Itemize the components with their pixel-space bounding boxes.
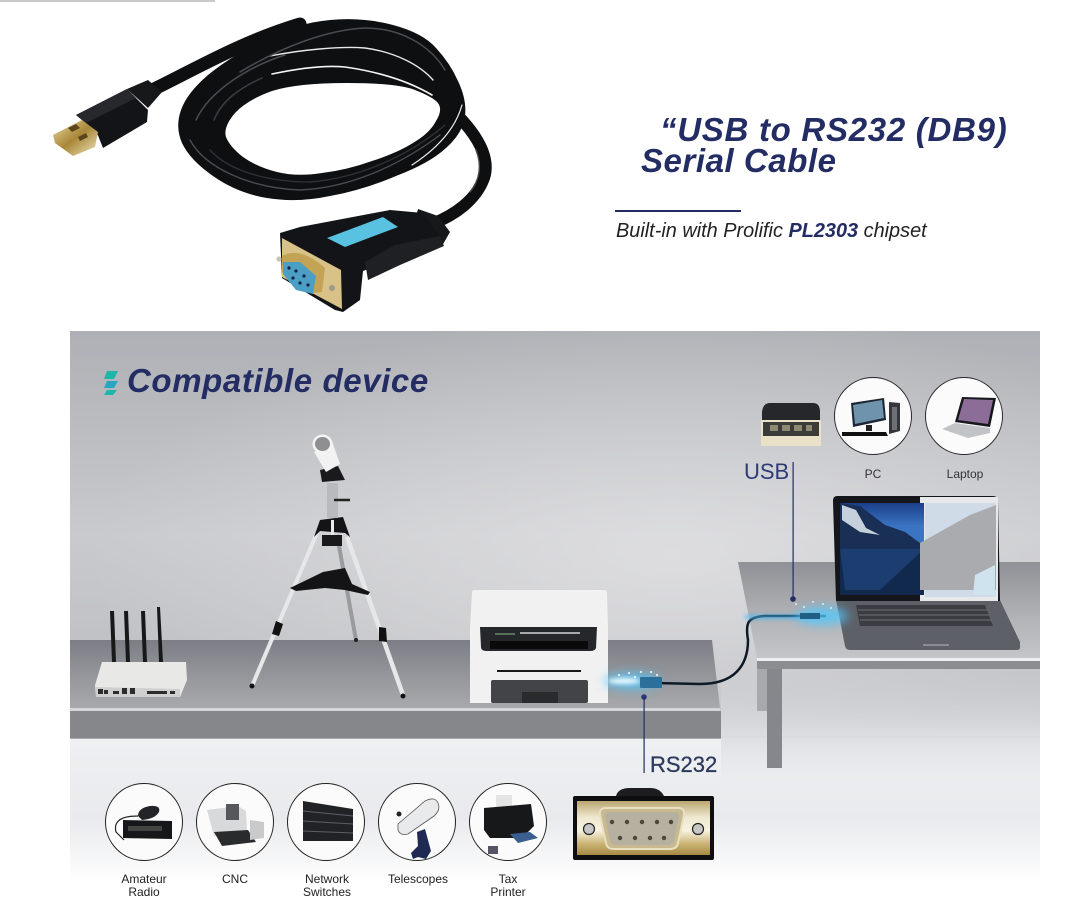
telescope on tripod bbox=[250, 434, 406, 698]
subtitle: Built-in with Prolific PL2303 chipset bbox=[616, 220, 928, 242]
panel: compatible device scene bbox=[70, 331, 1040, 919]
icon: USB port bbox=[761, 403, 821, 446]
label: tax printer: Printer bbox=[490, 885, 526, 899]
heading: product title bbox=[641, 111, 1007, 179]
heading: product title: “USB to RS232 (DB9) bbox=[660, 111, 1007, 148]
icon: DB9 male connector bbox=[573, 788, 714, 860]
USB connection with glow bbox=[795, 602, 848, 625]
icon: telescope bbox=[378, 784, 456, 860]
label: amateur radio: Amateur bbox=[121, 872, 167, 886]
product photo: USB to RS232 cable bbox=[53, 19, 486, 312]
heading: compatible device: Compatible device bbox=[127, 362, 429, 399]
label: CNC: CNC bbox=[222, 872, 248, 886]
label: telescopes: Telescopes bbox=[388, 872, 448, 886]
heading: product title: Serial Cable bbox=[641, 142, 837, 179]
high desk bbox=[738, 562, 1040, 768]
RS232 cable with glow bbox=[604, 615, 826, 689]
icon: network switches bbox=[288, 784, 364, 860]
icon: tax printer bbox=[470, 784, 546, 860]
low shelf bbox=[70, 640, 721, 739]
RS232 callout bbox=[641, 694, 717, 777]
USB plug bbox=[53, 80, 162, 156]
label: network switches: Network bbox=[305, 872, 350, 886]
label: tax printer: Tax bbox=[499, 872, 517, 886]
label: network switches: Switches bbox=[303, 885, 351, 899]
icon: laptop bbox=[926, 378, 1002, 454]
room background bbox=[70, 331, 1040, 919]
cable coils bbox=[150, 19, 486, 224]
printer bbox=[470, 590, 608, 703]
DB9 connector bbox=[276, 209, 450, 312]
laptop label: Laptop bbox=[947, 467, 984, 481]
laptop bbox=[833, 496, 1020, 650]
USB callout bbox=[744, 459, 796, 602]
top hairline bbox=[0, 0, 215, 2]
RS232 callout: RS232 bbox=[650, 752, 717, 777]
icon: CNC bbox=[196, 784, 274, 860]
icon: amateur radio bbox=[106, 784, 182, 860]
PC label: PC bbox=[865, 467, 882, 481]
label: amateur radio: Radio bbox=[128, 885, 160, 899]
router bbox=[95, 607, 187, 697]
USB callout: USB bbox=[744, 459, 789, 484]
icon: PC bbox=[834, 378, 912, 454]
